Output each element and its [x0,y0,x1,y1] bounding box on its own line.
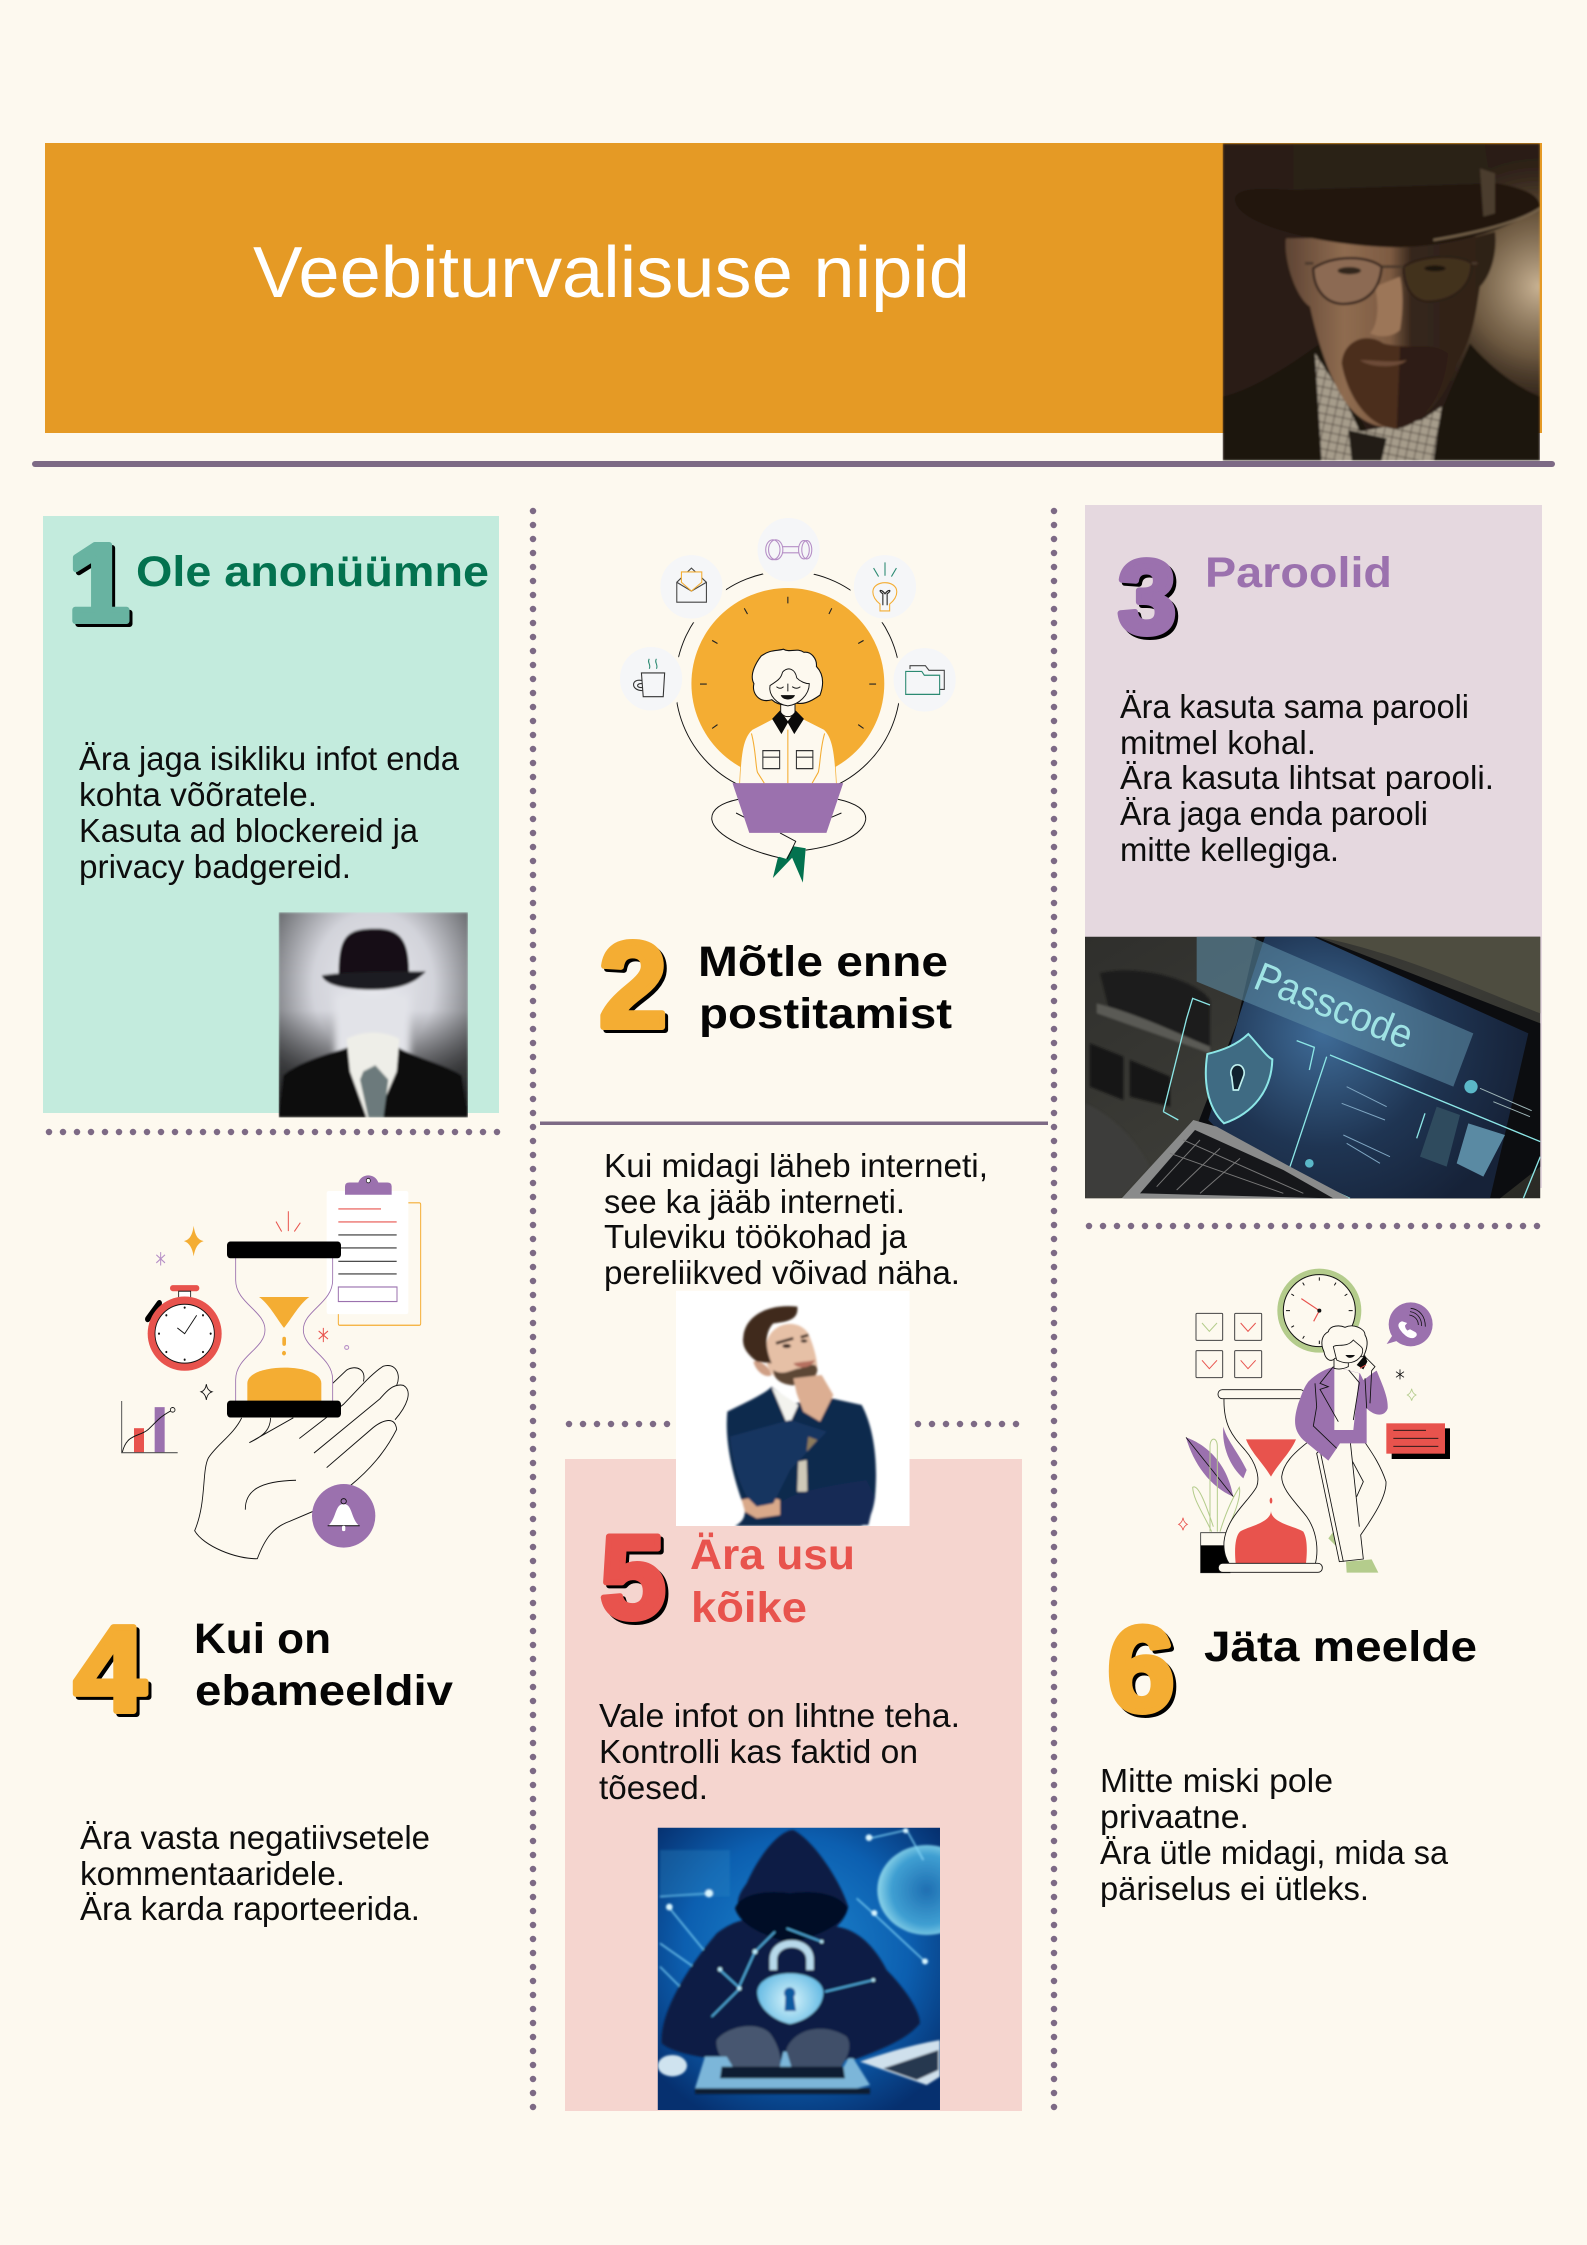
orange dial [691,588,884,779]
ring [675,571,900,796]
wall clock [1277,1269,1361,1353]
body text: mitte kellegiga. [1120,831,1339,868]
body text: Mitte miski pole [1100,1762,1333,1799]
body text: Ära vasta negatiivsetele [80,1819,430,1856]
header banner [32,143,1555,467]
heading: Kui on [194,1615,331,1663]
body text [79,740,460,885]
body text: see ka jääb interneti. [604,1183,905,1220]
number 6: 6 [1110,1604,1178,1740]
hourglass [227,1241,341,1417]
head and curly hair [1322,1326,1367,1369]
number 1: 1 [71,525,133,648]
plant [1193,1439,1240,1532]
body text: kohta võõratele. [79,776,317,813]
hand [195,1365,408,1559]
plant pot [1201,1533,1230,1573]
purple leaves [1186,1427,1247,1497]
photo: invisible man in bowler hat [279,912,468,1118]
bar chart icon [122,1401,178,1453]
body text: Ära jaga isikliku infot enda [79,740,460,777]
dial ticks [700,597,876,728]
body text: Ära kasuta lihtsat parooli. [1120,759,1494,796]
heading: postitamist [699,990,952,1038]
photo: hooded hacker with padlock [658,1828,940,2110]
sparkles [156,1226,349,1400]
heading [690,1531,855,1632]
laptop [732,783,843,833]
icon: folder [892,646,957,714]
photo: laptop with passcode screen [1085,937,1540,1198]
body text: Tuleviku töökohad ja [604,1218,908,1255]
number 6: 6 [1107,1601,1175,1737]
shoes [1328,1529,1378,1573]
sleeve [763,832,796,859]
body with jacket [740,710,836,785]
panel 2: Mõtle enne postitamist [599,516,988,1291]
large hourglass [1218,1390,1322,1572]
number 3: 3 [1121,543,1179,659]
body text: Kui midagi läheb interneti, [604,1147,988,1184]
number 2: 2 [602,920,670,1056]
body text: Ära kasuta sama parooli [1120,688,1469,725]
icon: envelope [659,553,724,621]
body text [599,1697,960,1806]
panel 1: Ole anonüümne [43,516,499,1118]
body text: päriselus ei ütleks. [1100,1870,1369,1907]
keyboard [1122,1120,1350,1198]
body text: Kontrolli kas faktid on [599,1733,918,1770]
number 5: 5 [600,1512,666,1644]
heading: Paroolid [1205,549,1392,597]
body text: Ära jaga enda parooli [1120,795,1428,832]
banner background [45,143,1542,433]
crossed legs [712,799,866,859]
body text [604,1147,988,1291]
heading: kõike [691,1584,807,1632]
icon: bell [312,1484,375,1548]
number 4: 4 [77,1604,149,1740]
number 1: 1 [68,522,130,645]
body text: Vale infot on lihtne teha. [599,1697,960,1734]
illustration: person with laptop and icons [618,516,957,883]
body text: Ära ütle midagi, mida sa [1100,1834,1449,1871]
body text: privaatne. [1100,1798,1249,1835]
body text [80,1819,430,1927]
message card [1386,1423,1450,1459]
title: Veebiturvalisuse nipid [253,233,970,313]
heading: ebameeldiv [195,1667,453,1715]
sparkles [1179,1369,1416,1530]
rays [276,1211,300,1232]
heading: Mõtle enne [698,938,948,986]
shield [1206,1034,1272,1123]
body text: mitmel kohal. [1120,724,1316,761]
heading: Ära usu [690,1531,855,1579]
heading: Ole anonüümne [136,548,489,596]
trousers [1317,1432,1386,1562]
panel 4: Kui on ebameeldiv [74,1175,453,1927]
icon: stopwatch [148,1285,222,1371]
number 2: 2 [599,917,667,1053]
vertical dotted dividers [49,511,1538,2110]
number 5: 5 [603,1515,669,1647]
number 3: 3 [1118,540,1176,656]
clipboard [327,1175,421,1325]
laptop screen [1208,937,1528,1198]
scarf tails [773,846,806,883]
panel 5: Ära usu kõike [565,1291,1022,2111]
icon: light bulb [852,553,918,621]
illustration: woman on phone with hourglass and clock [1179,1269,1450,1573]
body text: kommentaaridele. [80,1855,345,1892]
heading [698,938,952,1038]
divider line under banner [32,461,1555,467]
person head and hair [752,649,823,717]
checkbox grid [1196,1313,1262,1378]
body text: tõesed. [599,1769,708,1806]
photo: thinking man [676,1291,910,1526]
middle divider line [540,1122,1048,1125]
body text: Ära karda raporteerida. [80,1890,420,1927]
panel 6: Jäta meelde [1100,1269,1477,1907]
Passcode label: Passcode [1248,953,1420,1058]
laptop bezel [1123,937,1540,1198]
body text [1120,688,1494,868]
body text: Kasuta ad blockereid ja [79,812,419,849]
panel background [565,1459,1022,2111]
purple jacket [1295,1367,1388,1461]
heading [194,1615,453,1715]
photo: man with hat and glasses [1223,143,1540,461]
body text: privacy badgereid. [79,848,351,885]
illustration: hand holding hourglass [122,1175,421,1559]
icon: coffee cup [618,645,684,712]
phone speech bubble [1387,1302,1433,1346]
number 4: 4 [74,1601,146,1737]
panel background [1085,505,1542,1188]
panel 3: Paroolid [1085,505,1542,1198]
heading: Jäta meelde [1204,1623,1477,1671]
body text: pereliikved võivad näha. [604,1254,960,1291]
icon: dumbbell [756,516,821,583]
body text [1100,1762,1449,1907]
panel background [43,516,499,1113]
